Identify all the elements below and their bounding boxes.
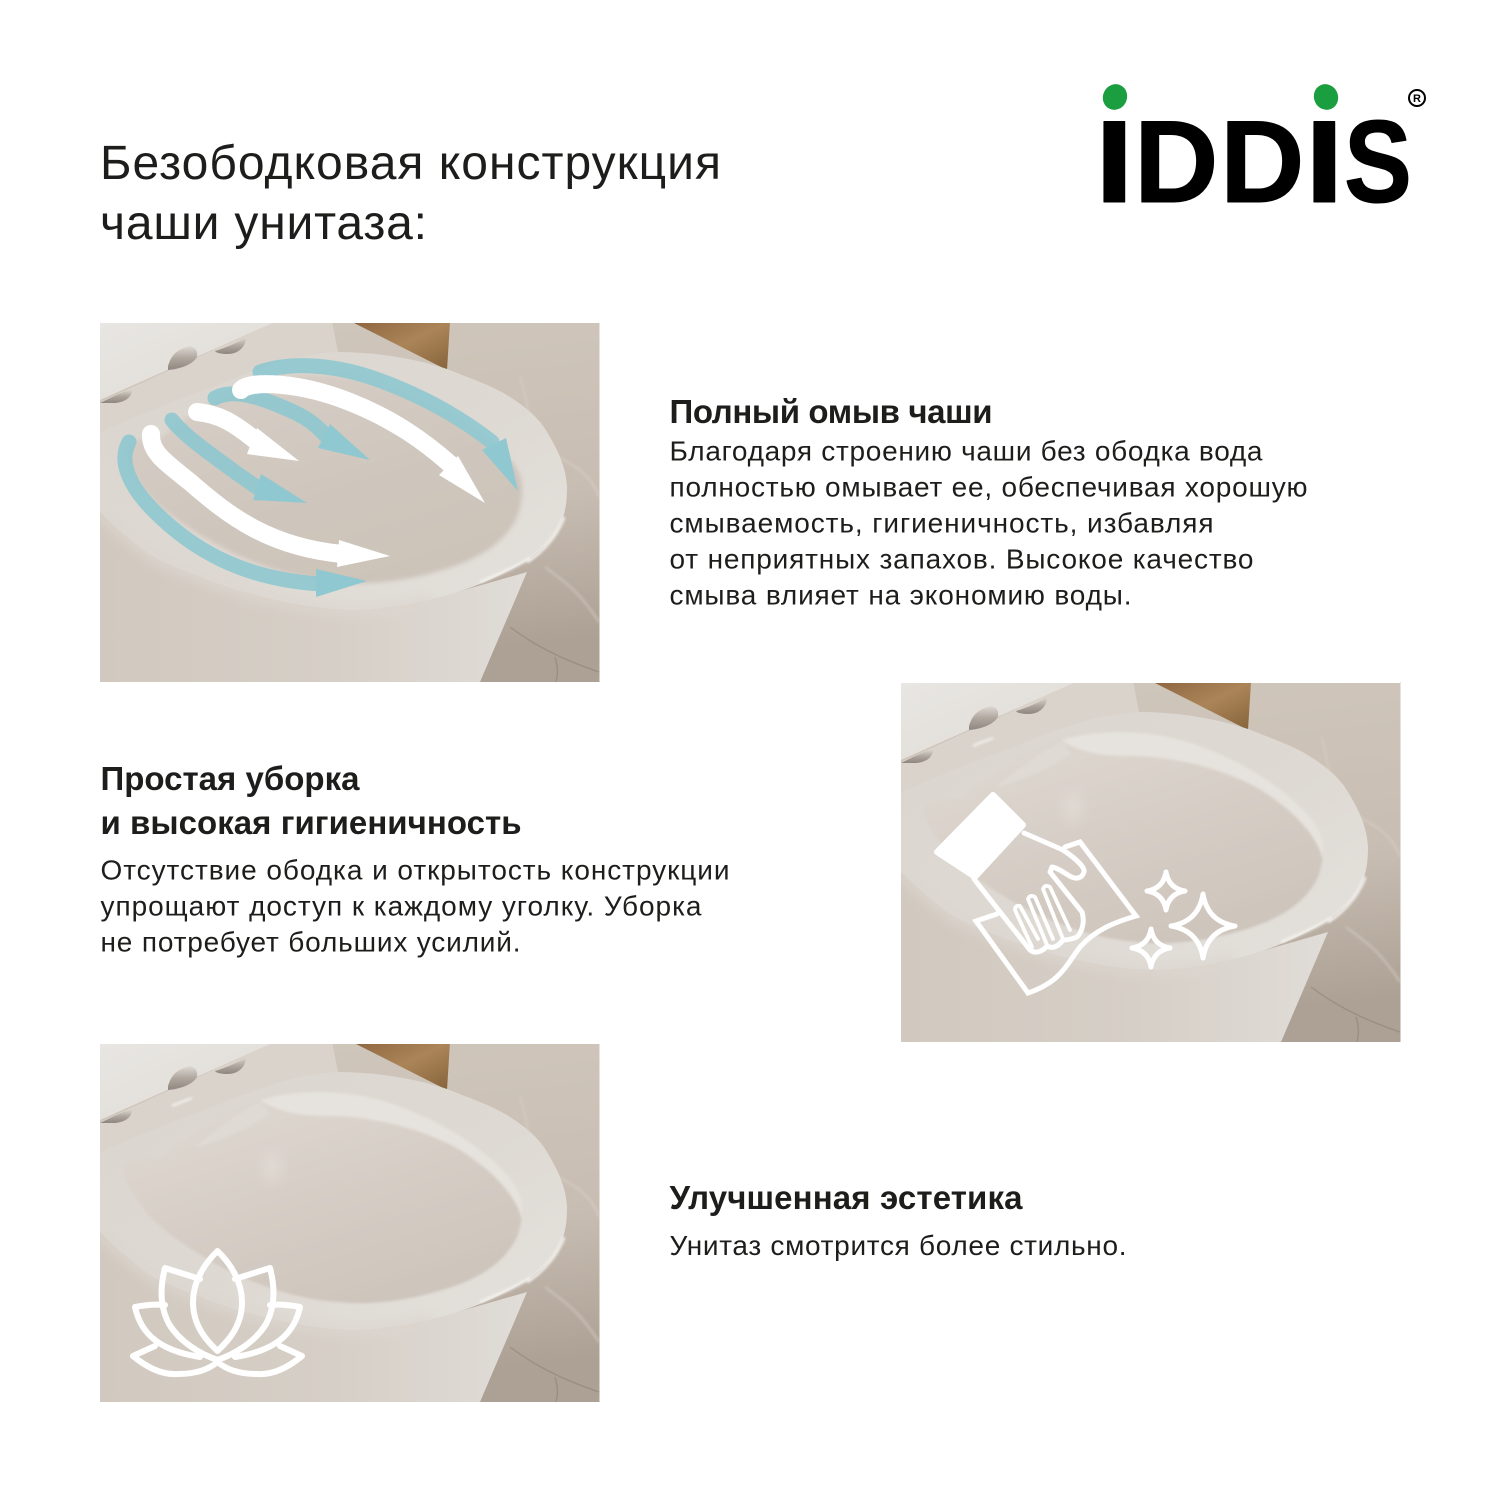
- logo green dots: [1099, 80, 1342, 114]
- registered mark: R: [1413, 93, 1421, 105]
- title: [100, 137, 721, 250]
- body text: от неприятных запахов. Высокое качество: [670, 544, 1254, 574]
- body text: Отсутствие ободка и открытость конструкции: [100, 854, 730, 886]
- logo wordmark: D: [1134, 96, 1218, 227]
- heading: Улучшенная эстетика: [670, 1179, 1023, 1216]
- logo: IDDIS: [1094, 80, 1425, 228]
- logo wordmark: D: [1220, 96, 1304, 227]
- heading: Простая уборка: [100, 760, 360, 797]
- teal flow arrows: [125, 366, 518, 597]
- heading: и высокая гигиеничность: [100, 804, 522, 841]
- text block: improved aesthetics: [670, 1179, 1126, 1261]
- body text: не потребует больших усилий.: [100, 926, 520, 958]
- icon: lotus: [133, 1251, 302, 1374]
- logo wordmark: [1094, 96, 1412, 228]
- title: чаши унитаза:: [100, 197, 427, 250]
- icon: sparkles: [1132, 872, 1235, 967]
- body text: полностью омывает ее, обеспечивая хорошую: [670, 472, 1308, 502]
- panel: photo with water flow arrows: [100, 322, 600, 682]
- text block: easy cleaning: [100, 760, 730, 958]
- body text: смыва влияет на экономию воды.: [670, 580, 1132, 610]
- body text: упрощают доступ к каждому уголку. Уборка: [100, 890, 702, 922]
- body text: Унитаз смотрится более стильно.: [670, 1230, 1126, 1261]
- panel: photo with cleaning icon: [900, 682, 1401, 1042]
- body text: смываемость, гигиеничность, избавляя: [670, 508, 1214, 538]
- title: Безободковая конструкция: [100, 137, 721, 190]
- logo wordmark: I: [1094, 96, 1134, 227]
- logo wordmark: S: [1344, 97, 1412, 228]
- heading: Полный омыв чаши: [670, 393, 992, 430]
- icon: hand with cloth: [937, 795, 1136, 993]
- logo wordmark: I: [1304, 96, 1344, 227]
- body text: [100, 854, 730, 958]
- heading: [100, 760, 522, 841]
- text block: full bowl flush: [670, 393, 1308, 610]
- white flow arrows: [151, 384, 485, 567]
- registered mark: [1409, 90, 1425, 106]
- body text: [670, 436, 1308, 610]
- body text: Благодаря строению чаши без ободка вода: [670, 436, 1263, 466]
- panel: photo with lotus icon: [100, 1042, 600, 1402]
